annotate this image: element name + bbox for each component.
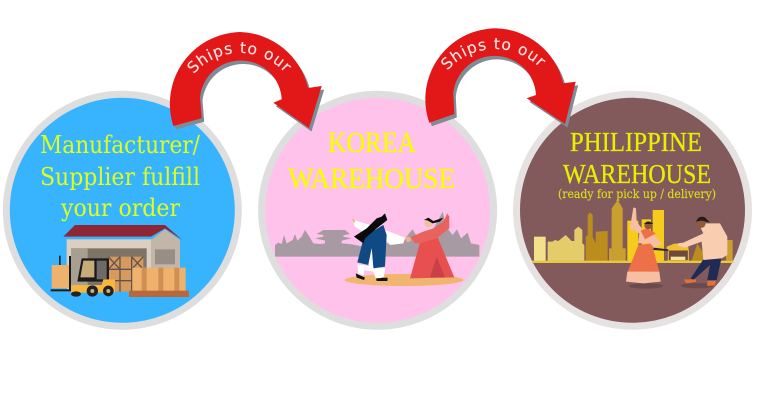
heading: Philippine warehouse: PHILIPPINE [570, 127, 702, 157]
text: ready for pick up or delivery: (ready for pick up / delivery) [558, 186, 716, 201]
heading: manufacturer: your order [60, 194, 180, 222]
icon: Korean skyline [275, 212, 479, 257]
heading: Korea warehouse: WAREHOUSE [288, 164, 455, 195]
panel: Korea warehouse circle [262, 94, 494, 326]
label: ships to our: Ships to our [441, 38, 546, 70]
heading: manufacturer: Manufacturer/ [40, 131, 201, 159]
panel: Philippine warehouse circle [516, 94, 748, 326]
arrow: ships to Korea [170, 32, 324, 132]
heading: Philippine warehouse [563, 127, 711, 189]
icon: Korean dancers [345, 213, 463, 286]
heading: Korea warehouse [288, 128, 455, 195]
icon: Manila skyline [532, 200, 733, 263]
heading: Korea warehouse: KOREA [328, 128, 417, 159]
label: ships to our: Ships to our [188, 42, 292, 74]
heading: Philippine warehouse: WAREHOUSE [563, 159, 711, 189]
icon: warehouse and forklift [51, 225, 189, 297]
heading: manufacturer [40, 131, 201, 222]
arrow: ships to Philippines [425, 28, 578, 128]
icon: Filipino dancers [626, 207, 727, 289]
panel: manufacturer circle [6, 94, 238, 326]
heading: manufacturer: Supplier fulfill [40, 163, 200, 191]
